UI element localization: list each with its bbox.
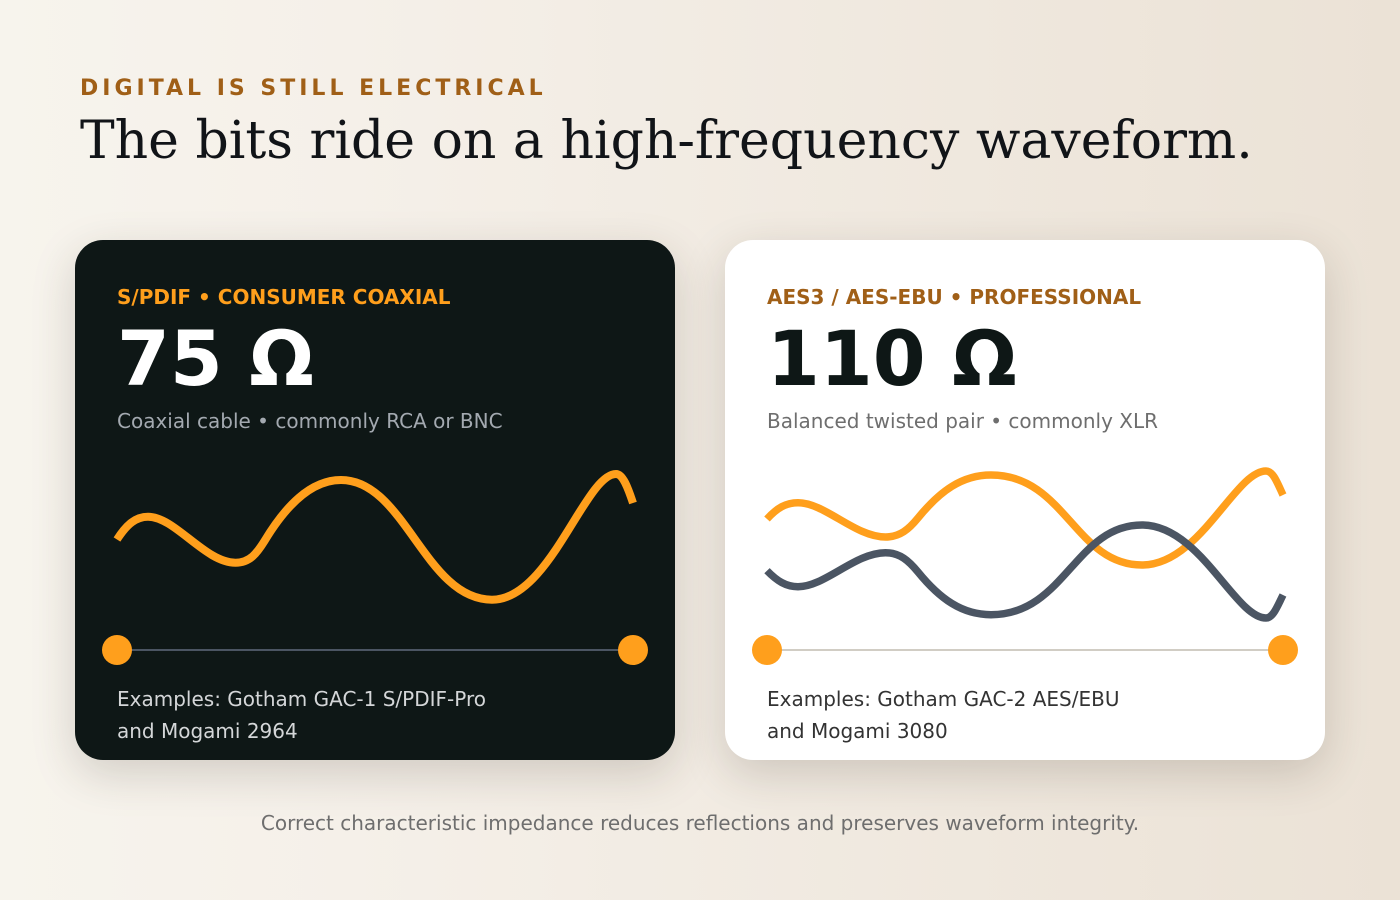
panel: S/PDIF — [75, 240, 675, 760]
label: S/PDIF: S/PDIF • CONSUMER COAXIAL — [117, 285, 450, 309]
cable line: AES3 — [752, 635, 1298, 665]
examples: and Mogami 2964 — [117, 719, 298, 743]
cable description: Balanced twisted pair • commonly XLR — [767, 409, 1158, 433]
examples — [767, 687, 1119, 743]
label: AES3: AES3 / AES-EBU • PROFESSIONAL — [767, 285, 1141, 309]
waveform: S/PDIF signal — [117, 474, 633, 600]
examples — [117, 687, 486, 743]
eyebrow: DIGITAL IS STILL ELECTRICAL — [80, 76, 547, 101]
examples: Examples: Gotham GAC-2 AES/EBU — [767, 687, 1119, 711]
title: The bits ride on a high-frequency waveform. — [80, 111, 1253, 171]
impedance value: 110 ohm: 110 Ω — [767, 314, 1017, 403]
waveform: AES3 positive signal — [767, 471, 1283, 565]
waveform: AES3 inverted signal — [767, 525, 1283, 618]
impedance value: 75 ohm: 75 Ω — [117, 314, 314, 403]
examples: Examples: Gotham GAC-1 S/PDIF-Pro — [117, 687, 486, 711]
examples: and Mogami 3080 — [767, 719, 948, 743]
footer note: Correct characteristic impedance reduces reflections and preserves waveform integrity. — [261, 811, 1139, 835]
cable description: Coaxial cable • commonly RCA or BNC — [117, 409, 503, 433]
cable line: S/PDIF — [102, 635, 648, 665]
panel: AES3 — [725, 240, 1325, 760]
